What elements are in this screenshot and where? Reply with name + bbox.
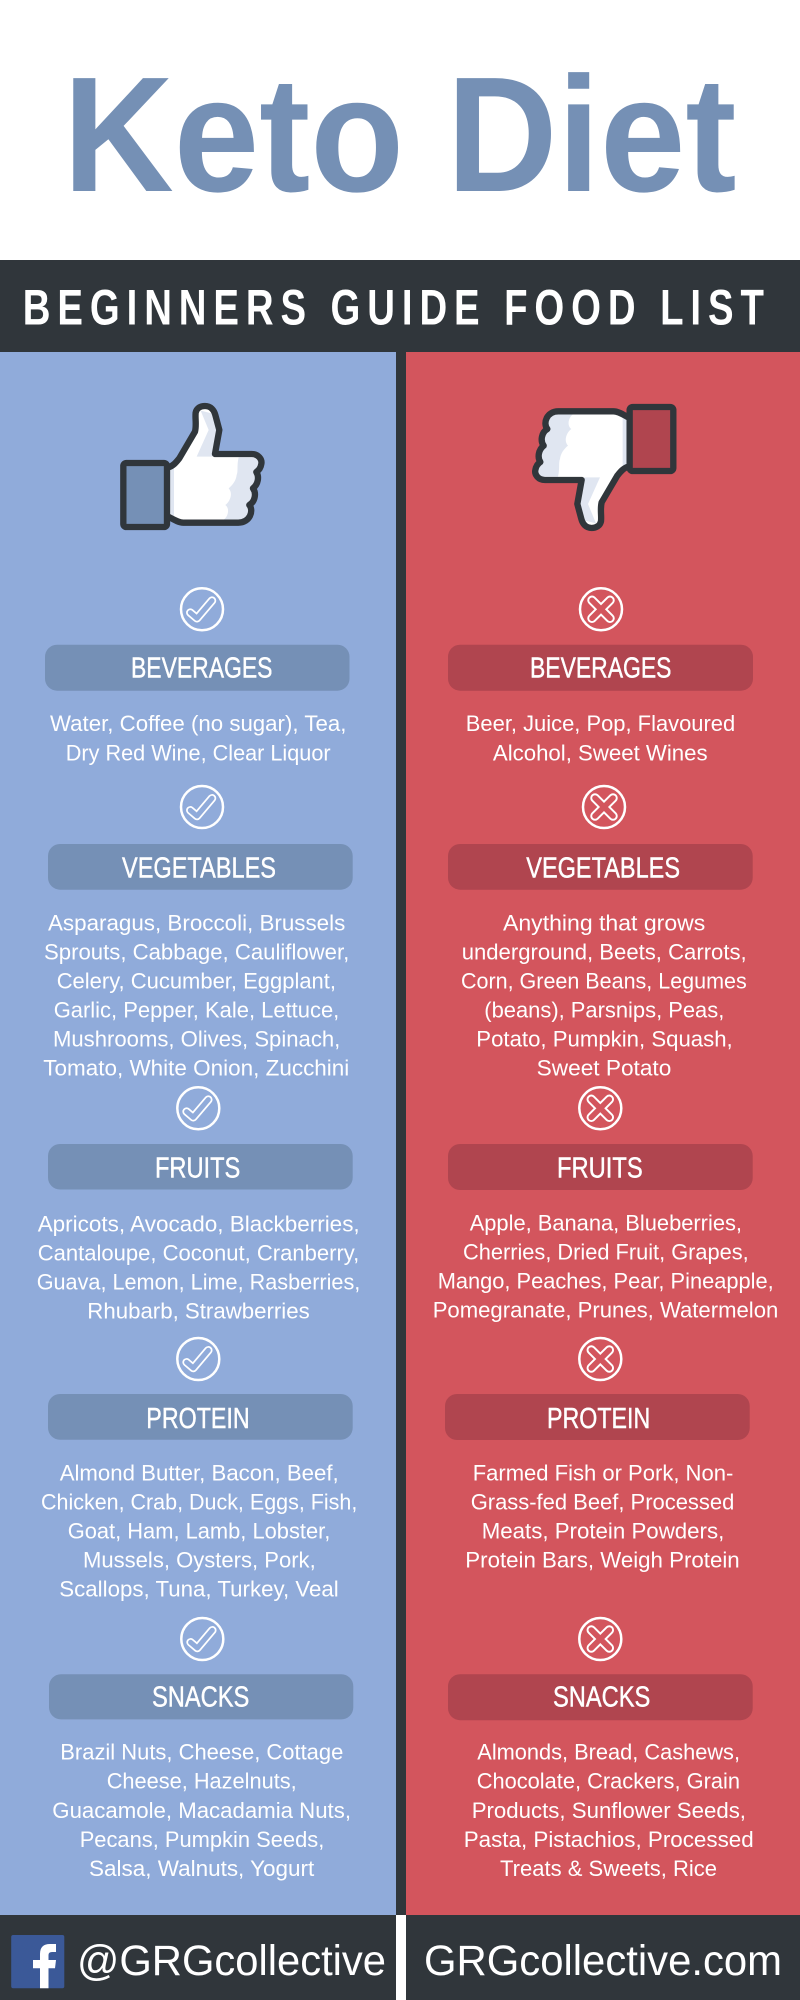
food list: Guacamole, Macadamia Nuts,	[52, 1798, 351, 1823]
food list: Corn, Green Beans, Legumes	[461, 968, 747, 993]
facebook handle: @GRGcollective	[77, 1938, 386, 1985]
food list: Pasta, Pistachios, Processed	[464, 1827, 754, 1852]
food list: Tomato, White Onion, Zucchini	[43, 1055, 349, 1080]
food list: Dry Red Wine, Clear Liquor	[66, 740, 331, 765]
food list: Cheese, Hazelnuts,	[107, 1769, 297, 1794]
icon: cross	[579, 1618, 621, 1660]
food list: Apricots, Avocado, Blackberries,	[38, 1212, 360, 1237]
section: beverages	[448, 588, 753, 765]
food list: Garlic, Pepper, Kale, Lettuce,	[54, 997, 339, 1022]
food list: Guava, Lemon, Lime, Rasberries,	[37, 1270, 360, 1295]
food list: Apple, Banana, Blueberries,	[470, 1211, 742, 1236]
section: fruits	[433, 1087, 778, 1323]
food list	[461, 911, 747, 1080]
food list: Potato, Pumpkin, Squash,	[476, 1026, 733, 1051]
icon: check	[177, 1338, 219, 1380]
food list: Sprouts, Cabbage, Cauliflower,	[44, 939, 349, 964]
food list	[41, 1460, 357, 1601]
icon: cross	[580, 588, 622, 630]
food list	[50, 711, 346, 765]
food list: Chicken, Crab, Duck, Eggs, Fish,	[41, 1489, 357, 1514]
heading pill: PROTEIN	[146, 1403, 250, 1435]
food list: Alcohol, Sweet Wines	[493, 740, 708, 765]
section: protein	[41, 1338, 357, 1601]
heading pill: BEVERAGES	[131, 653, 272, 685]
heading pill	[448, 1674, 753, 1720]
title: Keto Diet	[63, 43, 736, 226]
footer	[0, 1915, 800, 2000]
icon: cross	[579, 1338, 621, 1380]
food list: Mushrooms, Olives, Spinach,	[53, 1026, 340, 1051]
food list	[466, 711, 735, 765]
section: beverages	[45, 588, 350, 765]
food list: Almonds, Bread, Cashews,	[477, 1740, 740, 1765]
section: protein	[445, 1338, 750, 1572]
heading pill: BEVERAGES	[530, 653, 671, 685]
heading pill	[445, 1394, 750, 1440]
food list: Goat, Ham, Lamb, Lobster,	[68, 1518, 330, 1543]
heading pill	[448, 844, 753, 890]
food list: Chocolate, Crackers, Grain	[477, 1769, 740, 1794]
food list: Almond Butter, Bacon, Beef,	[60, 1460, 339, 1486]
food list: Protein Bars, Weigh Protein	[465, 1547, 740, 1572]
food list: Pecans, Pumpkin Seeds,	[80, 1827, 324, 1852]
panel: foods to avoid	[406, 352, 800, 1915]
food list: Products, Sunflower Seeds,	[472, 1798, 746, 1823]
icon: cross	[579, 1087, 621, 1129]
section: vegetables	[43, 786, 353, 1080]
heading pill: VEGETABLES	[122, 853, 276, 885]
heading pill: SNACKS	[553, 1682, 650, 1714]
heading pill: FRUITS	[557, 1152, 643, 1184]
heading pill	[45, 645, 350, 691]
food list: Mango, Peaches, Pear, Pineapple,	[438, 1269, 774, 1294]
section: snacks	[448, 1618, 754, 1881]
heading pill: PROTEIN	[547, 1403, 650, 1435]
food list: Salsa, Walnuts, Yogurt	[89, 1856, 315, 1881]
panel: foods to eat	[0, 352, 396, 1915]
heading pill: SNACKS	[152, 1682, 249, 1714]
food list: Mussels, Oysters, Pork,	[83, 1547, 316, 1572]
food list: Cantaloupe, Coconut, Cranberry,	[38, 1241, 359, 1266]
heading pill	[48, 1394, 353, 1440]
heading pill	[448, 645, 753, 691]
icon: cross	[583, 786, 625, 828]
heading pill	[48, 1144, 353, 1190]
food list	[37, 1212, 360, 1324]
food list: Pomegranate, Prunes, Watermelon	[433, 1298, 778, 1323]
food list: Scallops, Tuna, Turkey, Veal	[59, 1576, 339, 1601]
food list: Cherries, Dried Fruit, Grapes,	[463, 1240, 749, 1265]
food list: Farmed Fish or Pork, Non-	[473, 1460, 733, 1486]
icon: check	[181, 1618, 223, 1660]
centre divider	[396, 352, 406, 1915]
icon: thumbs up	[123, 406, 261, 527]
food list: Treats & Sweets, Rice	[500, 1856, 717, 1881]
food list: Beer, Juice, Pop, Flavoured	[466, 711, 735, 736]
food list	[465, 1460, 740, 1572]
heading pill: VEGETABLES	[526, 853, 680, 885]
food list: Celery, Cucumber, Eggplant,	[57, 968, 336, 993]
icon: thumbs down	[535, 407, 673, 528]
icon: facebook	[11, 1935, 64, 1988]
icon: check	[181, 786, 223, 828]
food list: underground, Beets, Carrots,	[462, 939, 747, 964]
food list: Brazil Nuts, Cheese, Cottage	[60, 1740, 343, 1765]
food list: Water, Coffee (no sugar), Tea,	[50, 711, 346, 736]
banner: subtitle	[0, 260, 800, 352]
heading pill	[48, 844, 353, 890]
food list: Meats, Protein Powders,	[482, 1518, 724, 1543]
section: fruits	[37, 1087, 360, 1324]
food list: (beans), Parsnips, Peas,	[484, 997, 724, 1022]
food list	[464, 1740, 754, 1881]
food list: Rhubarb, Strawberries	[87, 1299, 310, 1324]
food list	[433, 1211, 778, 1323]
section: vegetables	[448, 786, 753, 1080]
section: snacks	[49, 1618, 353, 1881]
icon: check	[181, 588, 223, 630]
food list: Anything that grows	[503, 911, 705, 936]
heading pill	[448, 1144, 753, 1190]
food list: Grass-fed Beef, Processed	[471, 1489, 734, 1514]
heading pill: FRUITS	[155, 1152, 240, 1184]
food list	[43, 911, 349, 1080]
food list: Asparagus, Broccoli, Brussels	[48, 911, 345, 936]
website: GRGcollective.com	[424, 1938, 782, 1985]
food list	[52, 1740, 351, 1881]
heading pill	[49, 1674, 353, 1719]
food list: Sweet Potato	[537, 1055, 671, 1080]
icon: check	[177, 1087, 219, 1129]
